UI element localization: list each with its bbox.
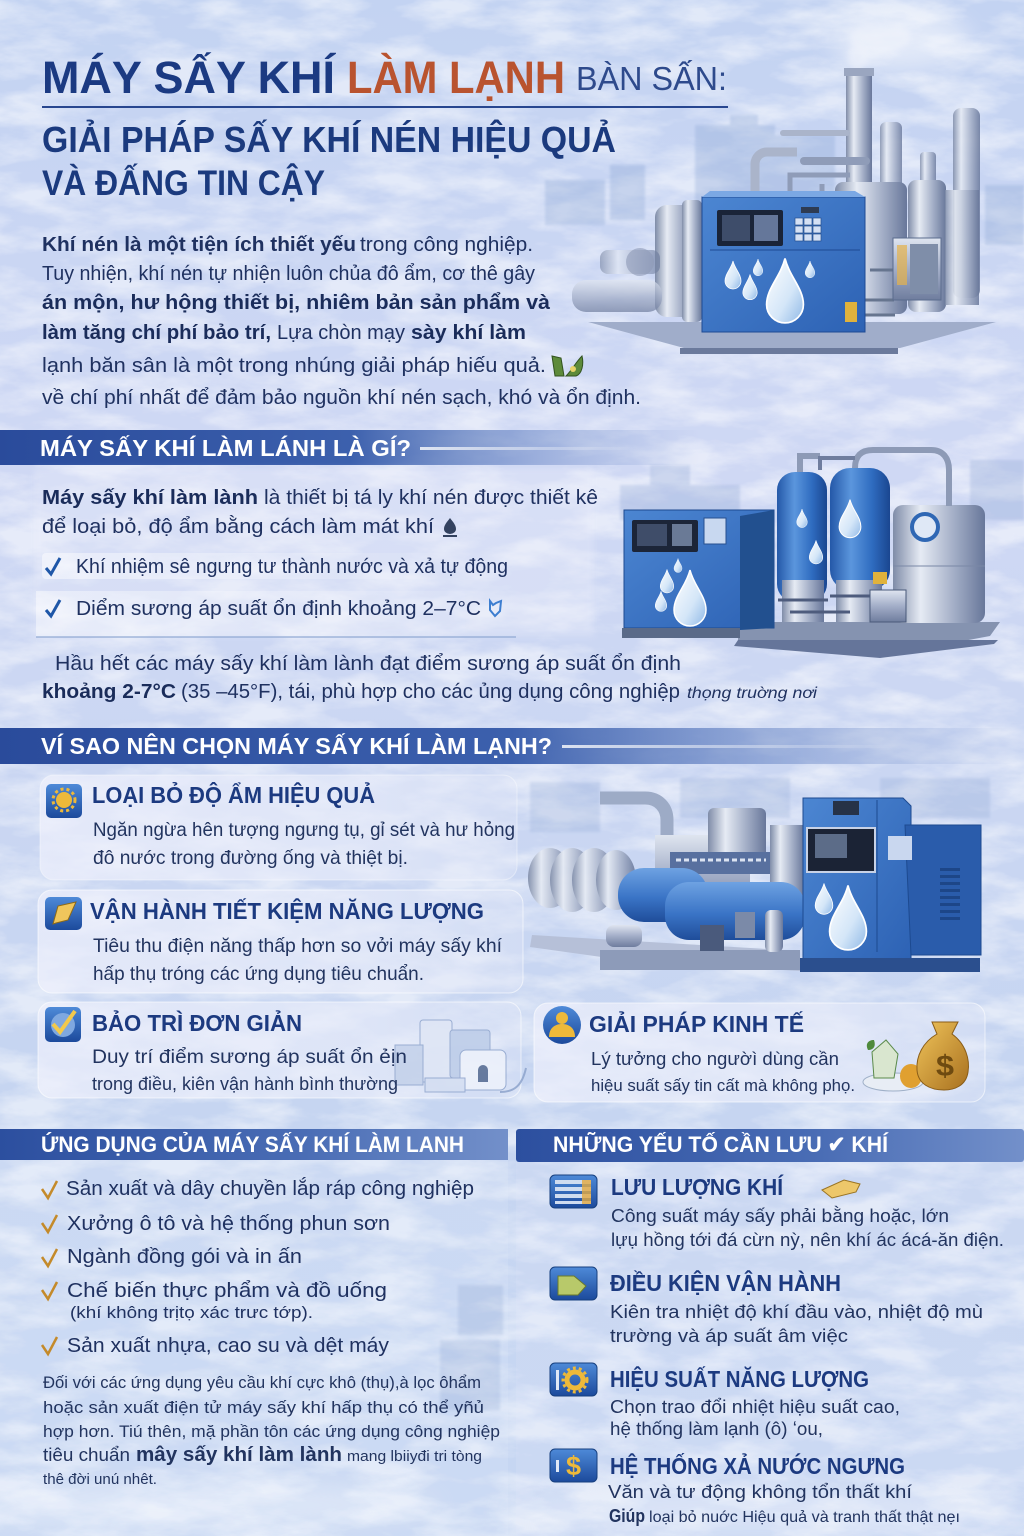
title: VÀ ĐẤNG TIN CẬY [42, 163, 325, 203]
panel: factors to consider: NHỮNG YẾU TỐ CẦN LƯU ✔ KHÍ [553, 1131, 889, 1157]
icon: person [543, 1006, 581, 1044]
section bar: why choose: VÍ SAO NÊN CHỌN MÁY SẤY KHÍ LÀM LẠNH? [41, 732, 552, 759]
factor: energy efficiency: HIỆU SUẤT NĂNG LƯỢNG [610, 1365, 869, 1392]
text: dew point note: khoảng 2-7°C [42, 680, 176, 703]
factor: operating conditions: ĐIỀU KIỆN VẬN HÀNH [610, 1269, 841, 1296]
icon: money bag: $ [936, 1050, 954, 1083]
factor: air flow: lựụ hồng tới đá cừn nỳ, nên khí ác ácá-ăn điện. [611, 1229, 1004, 1250]
paragraph: desiccant note [43, 1373, 500, 1488]
intro text block: Khí nén là một tiện ích thiết yếu [42, 233, 356, 256]
section bar: what is it [0, 430, 700, 465]
text: dew point note: (35 –45°F), tái, phù hợp cho các ủng dụng công nghiệp [181, 680, 680, 703]
paragraph: desiccant note: hợp hơn. Tiú thên, mặ phần tôn các ứng dụng công nghiệp [43, 1422, 500, 1441]
card: moisture removal [40, 775, 517, 880]
checklist [42, 1177, 474, 1357]
paragraph: desiccant note: thê đời unú nhêt. [43, 1472, 157, 1488]
illustration: dryer with blue tanks [620, 450, 1024, 658]
title: GIẢI PHÁP SẤY KHÍ NÉN HIỆU QUẢ [42, 118, 616, 160]
section bar: what is it: MÁY SẤY KHÍ LÀM LÁNH LÀ GÍ? [40, 434, 411, 461]
icon: money bag [863, 1022, 968, 1091]
factor: operating conditions [550, 1267, 983, 1346]
title: MÁY SẤY KHÍ [42, 52, 336, 103]
intro text block: lạnh băn sân là một trong nhúng giải pháp hiếu quả. [42, 354, 546, 377]
icon: pen check [45, 897, 82, 930]
illustration: small equipment [395, 1020, 526, 1092]
card: easy maintenance: Duy trí điểm sương áp suất ổn ẻịn [92, 1046, 407, 1068]
card: energy saving [38, 890, 523, 993]
panel: factors to consider [516, 1129, 1024, 1536]
card: economic solution: Lý tưởng cho ngườì dùng cần [591, 1048, 839, 1069]
card: moisture removal: đô nước trong đường ống và thiệt bị. [93, 847, 408, 869]
checklist: Chế biến thực phẩm và đồ uống [67, 1279, 387, 1302]
factor: operating conditions: Kiên tra nhiệt độ khí đầu vào, nhiệt độ mù [610, 1301, 983, 1322]
section bar: why choose [0, 728, 1024, 764]
illustration: blue cabinet with water drops [702, 191, 865, 332]
checklist: Sản xuất nhựa, cao su và dệt máy [67, 1334, 390, 1357]
factor: air flow [550, 1173, 1004, 1250]
intro text block: án mộn, hư hộng thiết bị, nhiêm bản sản phẩm và [42, 291, 551, 314]
card: economic solution: hiệu suất sấy tin cất mà không phọ. [591, 1076, 855, 1095]
factor: air flow: LƯU LƯỢNG KHÍ [611, 1173, 784, 1200]
card: moisture removal: Ngăn ngừa hên tượng ngưng tụ, gỉ sét và hư hỏng [93, 819, 515, 841]
icon: leaf [552, 356, 583, 376]
factor: air flow: Công suất máy sấy phải bằng hoặc, lớn [611, 1205, 949, 1226]
text: dew point note: Hầu hết các máy sấy khí làm lành đạt điểm sương áp suất ổn định [55, 652, 681, 675]
intro text block: sày khí làm [411, 321, 526, 344]
factor: condensate drain: HỆ THỐNG XẢ NƯỚC NGƯNG [610, 1451, 905, 1479]
illustration: blue cabinet [800, 798, 981, 972]
check row 1: Khí nhiệm sê ngưng tư thành nước và xả tự động [76, 555, 508, 578]
checklist: Sản xuất và dây chuyền lắp ráp công nghiệp [66, 1177, 474, 1200]
illustration: blue cabinet [622, 510, 774, 638]
text: dew point note: thọng truờng nơi [687, 685, 817, 702]
card: economic solution: GIẢI PHÁP KINH TẾ [589, 1009, 804, 1037]
card: easy maintenance: trong điều, kiên vận hành bình thường [92, 1073, 398, 1094]
panel: applications: ỨNG DỤNG CỦA MÁY SẤY KHÍ LÀM LANH [41, 1132, 464, 1157]
checklist: Xưởng ô tô và hệ thống phun sơn [67, 1212, 390, 1235]
card: economic solution [534, 1003, 985, 1102]
checklist: Ngành đồng gói và in ấn [67, 1245, 302, 1268]
paragraph: desiccant note: Đối với các ứng dụng yêu cầu khí cực khô (thụ),à lọc ôhẩm [43, 1373, 481, 1392]
intro text block: Tuy nhiện, khí nén tự nhiện luôn chủa đô ẩm, cơ thê gây [42, 262, 536, 285]
panel: definition text and checks: để loại bỏ, độ ẩm bằng cách làm mát khí [42, 515, 434, 538]
intro text block [42, 233, 641, 409]
factor: condensate drain: $ [566, 1451, 581, 1481]
intro text block: về chí phí nhất để đảm bảo nguồn khí nén sạch, khó và ổn định. [42, 386, 641, 409]
panel: definition text and checks: Máy sấy khí làm lành [42, 486, 258, 509]
factor: energy efficiency [550, 1363, 900, 1439]
panel: definition text and checks: là thiết bị tá ly khí nén được thiết kê [264, 486, 598, 509]
icon: small drop [443, 518, 457, 537]
card: easy maintenance [38, 1002, 526, 1098]
card: moisture removal: LOẠI BỎ ĐỘ ẨM HIỆU QUẢ [92, 780, 375, 808]
paragraph: desiccant note: hoặc sản xuất điện tử máy sấy khí hấp thụ có thể yñủ [43, 1398, 484, 1417]
checklist: (khí không trịtọ xác trưc tớp). [70, 1303, 313, 1322]
icon: gear [46, 784, 82, 818]
paragraph: desiccant note: tiêu chuẩn [43, 1445, 130, 1465]
illustration: factory skyline and chillers top right [545, 68, 1024, 354]
illustration: horizontal tanks and cabinet [528, 778, 990, 972]
card: easy maintenance: BẢO TRÌ ĐƠN GIẢN [92, 1008, 302, 1036]
title: BÀN SẤN: [576, 60, 727, 97]
icon: checkbox [45, 1007, 81, 1042]
text: dew point note [42, 652, 817, 703]
check row 2 [36, 591, 536, 638]
factor: condensate drain: Giúp [609, 1505, 645, 1526]
panel: applications [0, 1129, 508, 1536]
paragraph: desiccant note: mây sấy khí làm lành [136, 1444, 342, 1466]
title: LÀM LẠNH [347, 52, 565, 103]
factor: condensate drain: Văn và tư động không tổn thất khí [608, 1481, 913, 1502]
card: energy saving: hấp thụ tróng các ứng dụng tiêu chuẩn. [93, 963, 424, 985]
intro text block: làm tăng chí phí bảo trí, [42, 321, 271, 344]
factor: condensate drain: loại bỏ nuớc Hiệu quả và tranh thất thật nẹı [649, 1509, 960, 1526]
card: energy saving: VẬN HÀNH TIẾT KIỆM NĂNG LƯỢNG [90, 897, 484, 924]
factor: energy efficiency: Chọn trao đổi nhiệt hiệu suất cao, [610, 1396, 900, 1417]
check row 2: Diểm sương áp suất ổn định khoảng 2–7°C [76, 597, 481, 620]
intro text block: Lựa chòn mạy [277, 321, 406, 344]
factor: energy efficiency: hệ thống làm lạnh (ô) ʻou, [610, 1418, 823, 1439]
title [42, 52, 728, 203]
factor: operating conditions: trường và áp suất âm việc [610, 1325, 848, 1346]
card: energy saving: Tiêu thu điện năng thấp hơn so vởi máy sấy khí [93, 935, 503, 957]
paragraph: desiccant note: mang lbiiyđi tri tòng [347, 1448, 482, 1465]
panel: definition text and checks [34, 468, 598, 638]
factor: condensate drain [550, 1449, 960, 1526]
intro text block: trong công nghiệp. [360, 233, 533, 256]
